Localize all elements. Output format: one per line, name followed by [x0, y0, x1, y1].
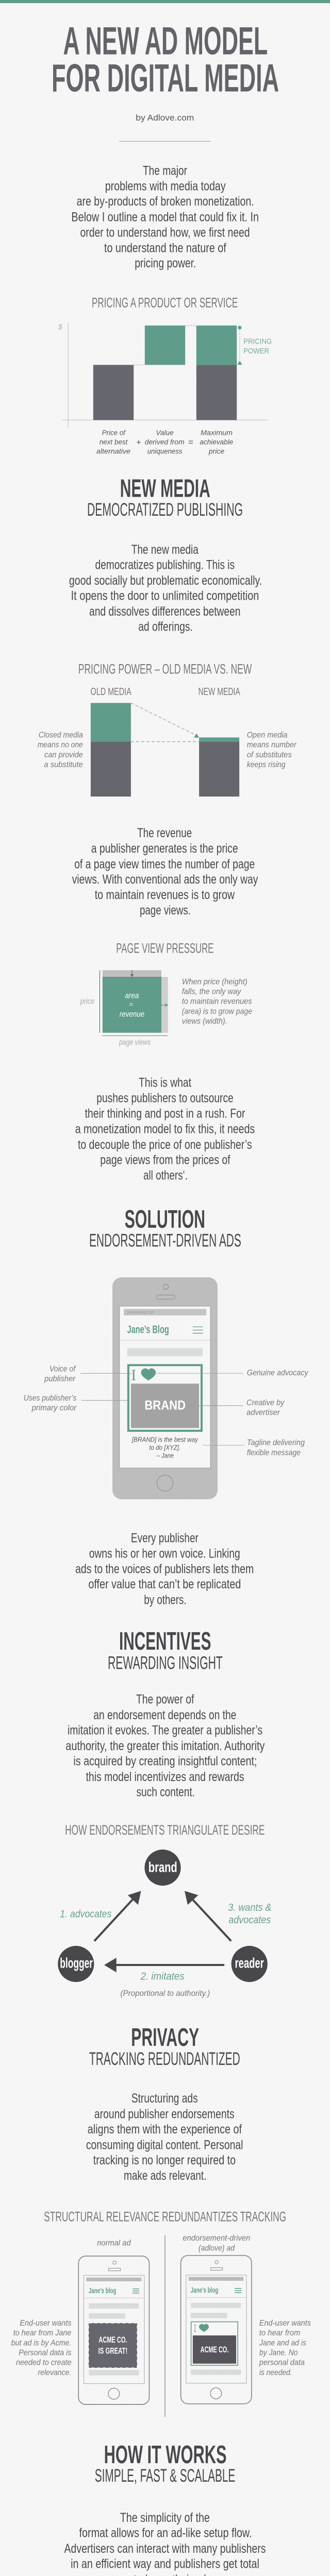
area chart: page view pressure: revenue: [120, 1010, 144, 1019]
new media text: The new media: [131, 543, 199, 557]
callout: creative by advertiser: Creative by: [246, 1398, 285, 1407]
chart heading: pricing a product or service: PRICING A PRODUCT OR SERVICE: [92, 295, 238, 311]
note: normal ad: to hear from Jane: [13, 2329, 71, 2337]
how it works text: [64, 2511, 266, 2576]
node: reader: [232, 1946, 268, 1982]
intro text: to understand the nature of: [104, 241, 226, 255]
note: proportional to authority: (Proportional to authority.): [121, 1989, 210, 1998]
decoupling text: page views from the prices of: [100, 1153, 230, 1167]
revenue text: The revenue: [137, 826, 192, 840]
revenue text: page views.: [140, 903, 191, 918]
voice text: Every publisher: [131, 1531, 199, 1545]
privacy text: around publisher endorsements: [94, 2107, 235, 2121]
intro text: The major: [143, 164, 187, 178]
endorsement ad: I: [131, 1366, 136, 1384]
intro text: problems with media today: [105, 179, 226, 193]
phone: normal ad: normal ad: [97, 2239, 131, 2248]
section heading: privacy: PRIVACY: [131, 2024, 199, 2052]
bar chart: pricing power: Value: [156, 429, 174, 437]
note: normal ad: but ad is by Acme.: [11, 2338, 71, 2347]
decoupling text: their thinking and post in a rush. For: [85, 1107, 245, 1121]
phone url bar: [124, 1309, 206, 1315]
new media text: and dissolves differences between: [89, 604, 240, 619]
bar chart: pricing power: Maximum: [201, 429, 233, 437]
phone: normal ad: ACME CO.: [98, 2335, 127, 2345]
bar chart: old media vs new media: NEW MEDIA: [198, 686, 240, 698]
note: normal ad: [11, 2319, 71, 2377]
callout: creative by advertiser: [199, 1398, 285, 1417]
phone: normal ad: IS GREAT!: [98, 2346, 127, 2356]
intro text: Below I outline a model that could fix it. In: [71, 210, 259, 224]
note: normal ad: End-user wants: [20, 2319, 71, 2328]
area chart: page view pressure: =: [129, 1001, 133, 1008]
privacy text: Structuring ads: [131, 2091, 198, 2106]
ad tagline: [131, 1436, 199, 1459]
area chart: page view pressure: to maintain revenues: [182, 997, 252, 1006]
callout: tagline: [203, 1438, 305, 1457]
endorsement ad: [128, 1365, 202, 1431]
blog header: [120, 1324, 210, 1357]
phone: endorsement ad: Jane’s blog: [191, 2286, 218, 2295]
incentives text: such content.: [136, 1785, 195, 1800]
decoupling text: to decouple the price of one publisher’s: [78, 1138, 252, 1152]
bar chart: old media vs new media: means no one: [38, 741, 83, 750]
incentives text: authority, the greater this imitation. Authority: [65, 1739, 265, 1753]
node: blogger: [58, 1946, 94, 1982]
section heading: how it works: SIMPLE, FAST & SCALABLE: [95, 2465, 235, 2486]
how it works text: The simplicity of the: [120, 2511, 210, 2525]
bar chart: pricing power: alternative: [96, 447, 130, 455]
phone: endorsement ad: ACME CO.: [201, 2345, 228, 2354]
revenue text: to maintain revenues is to grow: [95, 888, 235, 902]
note: endorsement ad: personal data: [259, 2359, 305, 2367]
note: endorsement ad: Jane and ad is: [259, 2338, 306, 2347]
bar chart: old media vs new media: Open media: [247, 731, 288, 739]
section heading: solution: SOLUTION: [125, 1206, 205, 1233]
callout: voice of publisher: [44, 1365, 132, 1383]
comparison: normal ad vs endorsement ad: [11, 2234, 311, 2417]
bar chart: pricing power: PRICING: [243, 337, 272, 346]
byline: by Adlove.com: [136, 113, 194, 123]
how it works text: format allows for an ad-like setup flow.: [79, 2526, 252, 2540]
bar chart: old media vs new media: [38, 686, 296, 796]
ad tagline: to do [XYZ].: [149, 1444, 180, 1451]
bar chart: old media vs new media: OLD MEDIA: [91, 686, 131, 698]
bar chart: old media vs new media: of substitutes: [247, 751, 292, 759]
phone body: [112, 1277, 218, 1499]
callout: creative by advertiser: advertiser: [246, 1408, 280, 1417]
note: endorsement ad: by Jane. No: [259, 2348, 298, 2358]
note: endorsement ad: End-user wants: [259, 2319, 311, 2328]
arrow: reader to brand: [185, 1891, 231, 1941]
phone: normal ad: Jane’s blog: [89, 2286, 116, 2295]
note: normal ad: needed to create: [16, 2359, 71, 2367]
phone: endorsement ad: [181, 2234, 252, 2404]
bar chart: pricing power: +: [136, 437, 141, 447]
decoupling text: all others‘.: [143, 1168, 188, 1183]
intro text: order to understand how, we first need: [80, 226, 250, 240]
endorsement ad: BRAND: [144, 1398, 186, 1413]
revenue text: views. With conventional ads the only way: [72, 872, 258, 887]
area chart: page view pressure: (area) is to grow page: [182, 1007, 252, 1016]
arrow: blogger to brand: [94, 1891, 141, 1941]
bar chart: old media vs new media: means number: [247, 741, 296, 750]
note: endorsement ad: to hear from: [259, 2329, 300, 2337]
callout: voice of publisher: publisher: [44, 1375, 76, 1383]
area chart: page view pressure: [80, 970, 252, 1047]
diagram: annotated phone ad: [24, 1277, 308, 1499]
incentives text: imitation it evokes. The greater a publisher’s: [68, 1723, 262, 1738]
blog header: Jane’s Blog: [127, 1324, 169, 1336]
bar chart: pricing power: price: [208, 447, 224, 455]
callout: uses publisher's color: Uses publisher’s: [24, 1394, 76, 1402]
callout: uses publisher's color: [24, 1394, 127, 1413]
decoupling text: pushes publishers to outsource: [96, 1091, 234, 1106]
arrow labels: advocates: [228, 1914, 271, 1926]
node: blogger: blogger: [60, 1955, 93, 1971]
privacy text: [86, 2091, 243, 2183]
area chart: page view pressure: price: [80, 997, 94, 1006]
callout: uses publisher's color: primary color: [31, 1403, 77, 1413]
bar chart: pricing power: =: [188, 437, 193, 447]
bar chart: pricing power: Price of: [102, 429, 126, 437]
intro text: are by-products of broken monetization.: [77, 194, 254, 209]
new media text: good socially but problematic economically.: [69, 573, 262, 588]
callout: genuine advocacy: Genuine advocacy: [247, 1368, 308, 1377]
decoupling text: [75, 1076, 255, 1183]
privacy text: aligns them with the experience of: [88, 2122, 242, 2137]
bar chart: pricing power: $: [58, 323, 62, 331]
bar chart: pricing power: uniqueness: [147, 447, 183, 455]
section heading: incentives: INCENTIVES: [119, 1628, 211, 1655]
arrow labels: [60, 1902, 272, 1982]
phone: endorsement ad: (adlove) ad: [199, 2244, 235, 2252]
incentives text: an endorsement depends on the: [93, 1708, 236, 1722]
bar chart: old media vs new media: keeps rising: [247, 760, 286, 769]
decoupling text: a monetization model to fix this, it needs: [75, 1122, 255, 1137]
arrow labels: 2. imitates: [140, 1971, 185, 1982]
note: normal ad: relevance.: [38, 2368, 71, 2377]
section heading: incentives: [108, 1628, 223, 1673]
how it works text: Advertisers can interact with many publishers: [64, 2541, 266, 2556]
section heading: how it works: HOW IT WORKS: [104, 2441, 227, 2469]
callout: tagline: Tagline delivering: [247, 1438, 305, 1447]
phone: endorsement ad: endorsement-driven: [183, 2234, 250, 2243]
phone: normal ad: [78, 2239, 149, 2404]
top bar: [0, 0, 330, 3]
bar chart: pricing power: POWER: [243, 347, 269, 355]
triangle diagram: [58, 1850, 271, 1998]
revenue text: [72, 826, 258, 918]
incentives text: is acquired by creating insightful content;: [73, 1754, 257, 1769]
privacy text: make ads relevant.: [124, 2168, 206, 2183]
bar chart: pricing power: [58, 323, 272, 455]
bar chart: old media vs new media: Closed media: [39, 731, 83, 739]
bar chart: old media vs new media: can provide: [44, 751, 83, 759]
area chart: page view pressure: falls, the only way: [182, 987, 241, 996]
incentives text: this model incentivizes and rewards: [86, 1770, 244, 1784]
arrow: reader to blogger: [104, 1958, 224, 1972]
intro text: pricing power.: [135, 256, 196, 270]
area chart: page view pressure: page views: [119, 1038, 151, 1047]
bar chart: pricing power: next best: [100, 438, 128, 446]
voice text: [75, 1531, 254, 1607]
section heading: privacy: [89, 2024, 240, 2069]
callout: voice of publisher: Voice of: [50, 1365, 76, 1374]
new media text: [69, 543, 262, 634]
chart heading: page view pressure: PAGE VIEW PRESSURE: [116, 940, 213, 956]
new media text: democratizes publishing. This is: [95, 558, 235, 572]
bar chart: pricing power: achievable: [200, 438, 233, 446]
callout: tagline: flexible message: [247, 1448, 301, 1457]
voice text: offer value that can’t be replicated: [88, 1577, 241, 1591]
note: endorsement ad: is needed.: [259, 2368, 292, 2377]
node: brand: brand: [148, 1859, 177, 1875]
voice text: ads to the voices of publishers lets them: [75, 1562, 254, 1576]
node: brand: [144, 1850, 181, 1886]
section heading: incentives: REWARDING INSIGHT: [108, 1652, 223, 1673]
section heading: solution: [89, 1206, 241, 1250]
section heading: new media: [87, 475, 243, 520]
voice text: by others.: [144, 1592, 187, 1607]
how it works text: in an efficient way and publishers get total: [71, 2557, 259, 2571]
incentives text: [65, 1692, 265, 1800]
incentives text: The power of: [136, 1692, 194, 1707]
bar chart: pricing power: derived from: [145, 438, 185, 446]
privacy text: consuming digital content. Personal: [86, 2138, 243, 2152]
revenue text: of a page view times the number of page: [74, 857, 255, 871]
title: [52, 19, 279, 100]
voice text: owns his or her own voice. Linking: [89, 1547, 240, 1561]
node: reader: reader: [235, 1955, 264, 1971]
section heading: new media: NEW MEDIA: [120, 475, 210, 503]
note: endorsement ad: [259, 2319, 311, 2377]
section heading: how it works: [95, 2441, 235, 2486]
bar chart: old media vs new media: a substitute: [44, 760, 83, 769]
new media text: ad offerings.: [138, 620, 193, 634]
arrow labels: 3. wants &: [228, 1902, 271, 1913]
ad tagline: [BRAND] is the best way: [131, 1436, 199, 1444]
intro text: [71, 164, 259, 270]
privacy text: tracking is no longer required to: [93, 2153, 236, 2167]
arrow labels: 1. advocates: [60, 1908, 111, 1920]
area chart: page view pressure: area: [125, 992, 139, 1001]
area chart: page view pressure: When price (height): [182, 978, 248, 987]
revenue text: a publisher generates is the price: [91, 841, 238, 856]
area chart: page view pressure: views (width).: [182, 1017, 227, 1026]
new media text: It opens the door to unlimited competition: [71, 589, 259, 603]
note: normal ad: Personal data is: [19, 2348, 71, 2358]
phone url bar: janesblog.com: [127, 1310, 154, 1315]
decoupling text: This is what: [139, 1076, 191, 1090]
ad tagline: – Jane: [156, 1452, 174, 1459]
